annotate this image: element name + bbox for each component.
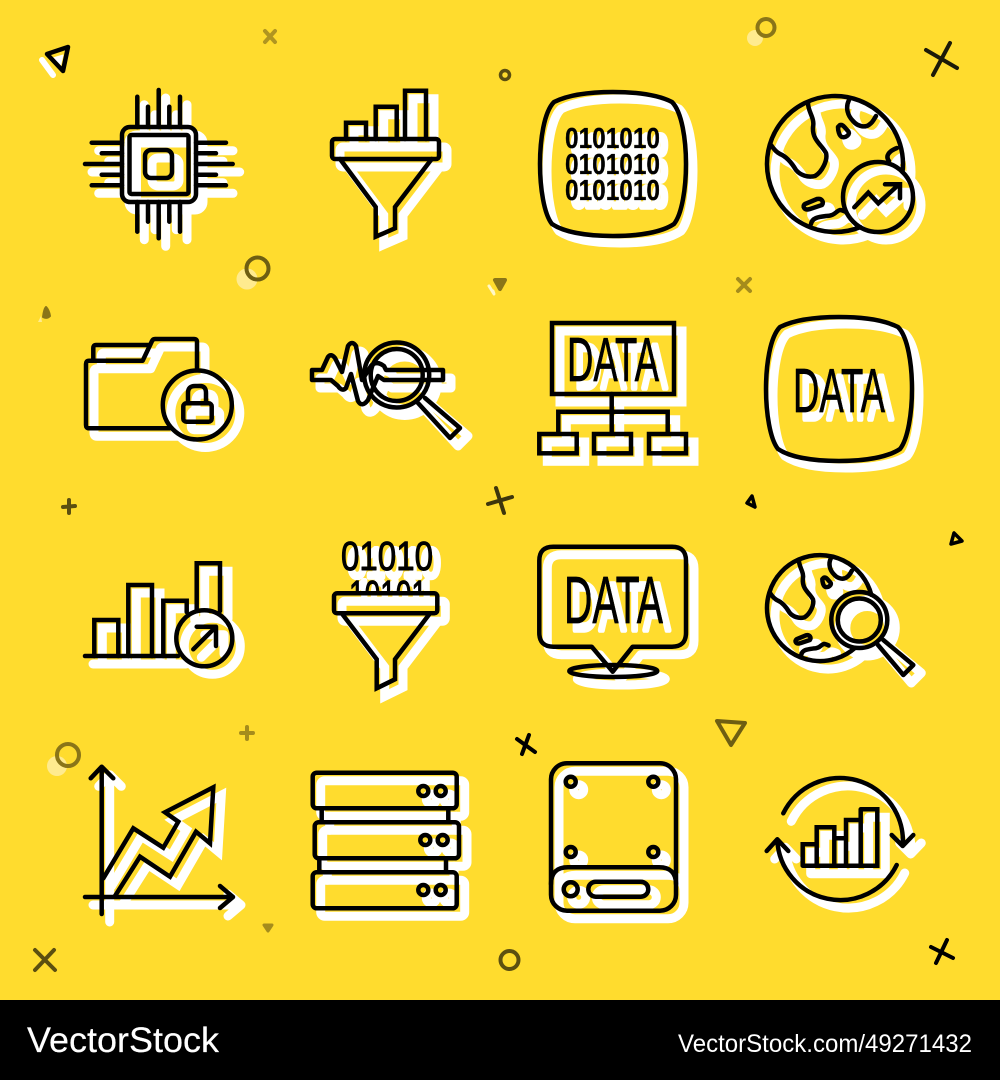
icon: funnel with binary digits: 01010 — [348, 540, 440, 586]
icon: binary code in rounded square: 0101010 — [572, 156, 667, 188]
icon: DATA speech bubble pin: DATA — [571, 570, 670, 645]
icon: funnel with bar chart — [332, 91, 447, 245]
icon: waveform under magnifier — [312, 342, 468, 446]
icon: growth arrow chart — [85, 767, 241, 922]
icon: DATA monitor with network tree: DATA — [575, 333, 667, 402]
icon: funnel with binary digits — [334, 533, 445, 696]
icon: DATA speech bubble pin — [539, 547, 694, 685]
icon: DATA monitor with network tree: DATA — [567, 326, 659, 395]
icon: funnel with binary digits: 01010 — [341, 533, 433, 579]
icon: hard drive — [551, 763, 684, 919]
icon: globe with growth chart — [767, 96, 921, 240]
icon: server rack — [313, 773, 467, 916]
icon: folder with padlock — [86, 339, 240, 448]
icon: DATA in rounded square: DATA — [793, 357, 885, 426]
icon: binary code in rounded square: 0101010 — [572, 130, 667, 162]
footer logo: VectorStock — [27, 1021, 220, 1060]
icon: binary code in rounded square: 0101010 — [572, 182, 667, 214]
icon: CPU chip — [85, 90, 240, 246]
icon: DATA speech bubble pin: DATA — [564, 563, 663, 638]
icon: DATA in rounded square: DATA — [801, 364, 893, 433]
icon: globe with magnifier — [767, 555, 921, 683]
icon: binary code in rounded square: 0101010 — [565, 123, 660, 155]
icon: DATA monitor with network tree — [539, 323, 694, 461]
icon: funnel with binary digits: 10101 — [349, 572, 427, 618]
icon: funnel with binary digits: 10101 — [356, 572, 434, 618]
icon: bar chart with arrow badge — [85, 563, 240, 674]
footer image id: VectorStock.com/49271432 — [678, 1030, 972, 1058]
mark: triangle top left — [42, 47, 68, 75]
icon: DATA in rounded square — [766, 317, 919, 468]
icon: binary code in rounded square: 0101010 — [565, 149, 660, 181]
footer band — [0, 1000, 1000, 1080]
icon: binary code in rounded square — [540, 92, 693, 243]
icon: binary code in rounded square: 0101010 — [565, 175, 660, 207]
icon: refresh arrows around bar chart — [767, 778, 921, 908]
